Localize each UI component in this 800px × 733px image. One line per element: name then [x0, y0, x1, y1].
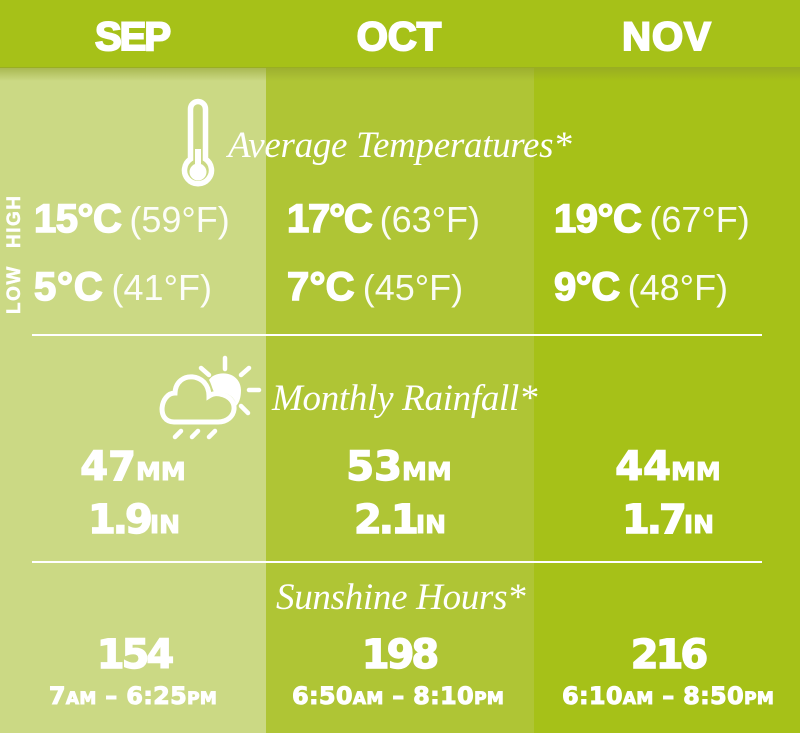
heading: SEP: SEP: [95, 15, 169, 59]
oct rainfall: 53MM: [346, 444, 452, 490]
heading: sunshine hours: Sunshine Hours*: [276, 577, 525, 618]
heading: NOV: NOV: [622, 15, 712, 59]
sep high temperature: 15°C(59°F): [34, 197, 230, 241]
icon: thermometer: [182, 98, 214, 186]
panel: october column: [266, 68, 534, 733]
nov daylight times: 6:10AM – 8:50PM: [562, 682, 774, 710]
icon: sun and rain cloud: [160, 356, 262, 440]
oct low temperature: 7°C(45°F): [287, 265, 463, 309]
panel: november column: [534, 68, 800, 733]
nov low temperature: 9°C(48°F): [554, 265, 728, 309]
header band: [0, 0, 800, 67]
oct sunshine: 198: [362, 632, 436, 678]
label: high: HIGH: [4, 194, 25, 248]
sep rainfall inches: 1.9IN: [88, 497, 180, 543]
oct rainfall inches: 2.1IN: [354, 497, 446, 543]
nov rainfall inches: 1.7IN: [622, 497, 714, 543]
sep daylight times: 7AM – 6:25PM: [49, 682, 217, 710]
sep low temperature: 5°C(41°F): [34, 265, 212, 309]
sep sunshine: 154: [97, 632, 171, 678]
panel: september column: [0, 68, 266, 733]
oct daylight times: 6:50AM – 8:10PM: [292, 682, 504, 710]
heading: OCT: OCT: [357, 15, 441, 59]
sep rainfall: 47MM: [80, 444, 186, 490]
nov rainfall: 44MM: [615, 444, 721, 490]
nov sunshine: 216: [631, 632, 705, 678]
header shadow: [0, 67, 800, 81]
oct high temperature: 17°C(63°F): [287, 197, 480, 241]
nov high temperature: 19°C(67°F): [554, 197, 750, 241]
heading: average temperatures: Average Temperatures*: [228, 125, 571, 166]
label: low: LOW: [4, 266, 25, 314]
heading: monthly rainfall: Monthly Rainfall*: [272, 378, 537, 419]
